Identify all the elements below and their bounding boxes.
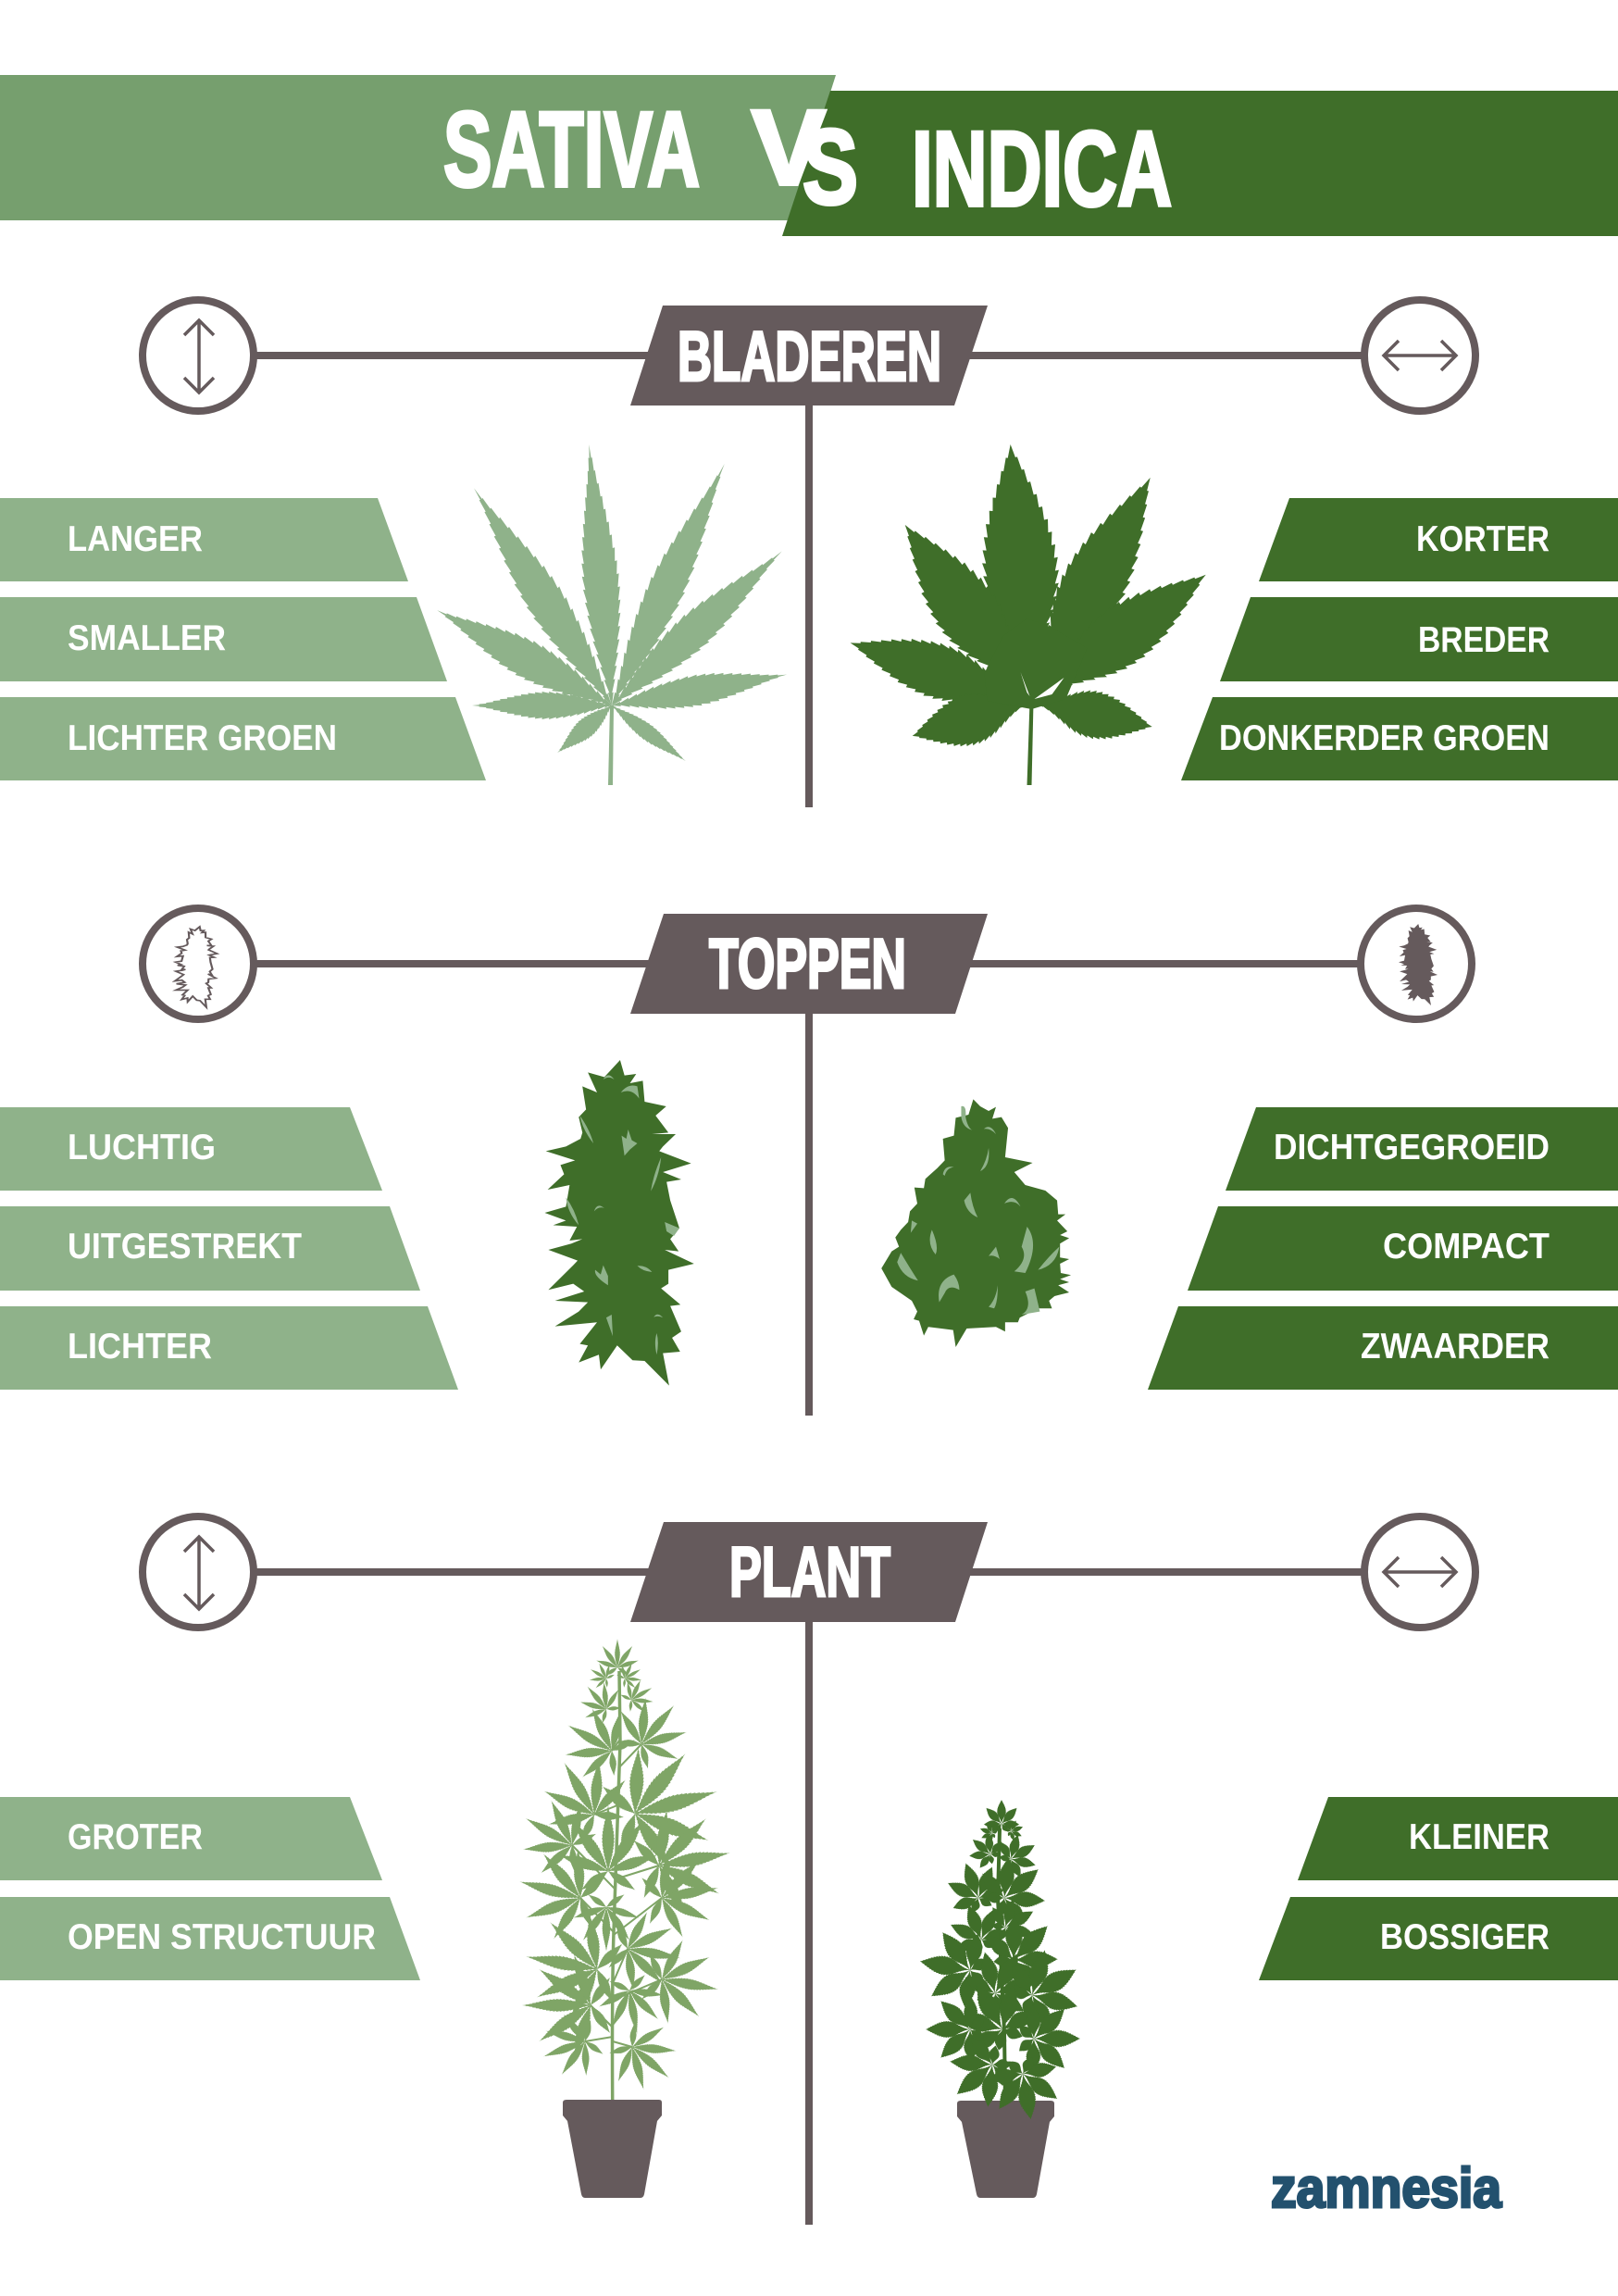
icon: indica bud <box>881 1099 1071 1347</box>
indica traits: COMPACT <box>1383 1227 1550 1267</box>
heading: PLANT <box>630 1522 988 1622</box>
icon: sativa plant <box>504 1639 740 2198</box>
sativa traits: SMALLER <box>68 618 226 658</box>
sativa traits: LUCHTIG <box>68 1128 216 1167</box>
indica traits <box>1148 1107 1618 1390</box>
title: VS: V <box>752 89 826 207</box>
icon: dense bud circle <box>1361 908 1472 1019</box>
sativa traits <box>0 1107 458 1390</box>
icon: indica leaf <box>841 442 1224 785</box>
indica traits: ZWAARDER <box>1361 1327 1550 1366</box>
sativa traits: LANGER <box>68 519 203 559</box>
icon: airy bud circle <box>143 908 254 1019</box>
title: VS <box>752 89 858 227</box>
heading: TOPPEN: TOPPEN <box>709 925 906 1004</box>
indica traits <box>1259 1797 1618 1980</box>
title: INDICA: INDICA <box>912 110 1172 229</box>
icon: indica plant <box>913 1800 1096 2198</box>
indica traits: BOSSIGER <box>1380 1917 1550 1957</box>
icon: vertical arrow circle <box>143 1516 254 1628</box>
icon: indica pot <box>957 2101 1054 2198</box>
indica traits: KLEINER <box>1409 1817 1550 1857</box>
indica traits: DICHTGEGROEID <box>1274 1128 1550 1167</box>
connector lines <box>254 356 1364 807</box>
logo: zamnesia: zamnesia <box>1271 2157 1502 2219</box>
connector lines <box>254 964 1361 1416</box>
indica traits: DONKERDER GROEN <box>1219 718 1550 758</box>
indica traits: BREDER <box>1418 620 1550 660</box>
sativa traits <box>0 498 486 780</box>
heading: BLADEREN: BLADEREN <box>678 318 941 396</box>
icon: sativa bud <box>544 1060 694 1386</box>
section: BLADEREN <box>0 300 1618 807</box>
header: sativa band <box>0 75 836 220</box>
indica traits: KORTER <box>1416 519 1550 559</box>
header: indica band <box>782 91 1618 236</box>
heading: BLADEREN <box>630 306 988 406</box>
icon: horizontal arrow circle <box>1364 300 1475 411</box>
icon: horizontal arrow circle <box>1364 1516 1475 1628</box>
sativa traits: OPEN STRUCTUUR <box>68 1917 376 1957</box>
sativa traits: LICHTER <box>68 1327 212 1366</box>
section: TOPPEN <box>0 908 1618 1416</box>
heading: TOPPEN <box>630 914 988 1014</box>
sativa traits: LICHTER GROEN <box>68 718 337 758</box>
icon: vertical arrow circle <box>143 300 254 411</box>
icon: sativa pot <box>563 2100 662 2198</box>
sativa traits: GROTER <box>68 1817 203 1857</box>
indica traits <box>1181 498 1618 780</box>
connector lines <box>254 1572 1364 2225</box>
icon: sativa leaf <box>428 443 794 785</box>
title: VS: S <box>803 108 858 227</box>
sativa traits: UITGESTREKT <box>68 1227 302 1267</box>
title: SATIVA: SATIVA <box>443 91 700 209</box>
sativa traits <box>0 1797 420 1980</box>
heading: PLANT: PLANT <box>729 1533 890 1612</box>
section: PLANT <box>0 1516 1618 2225</box>
